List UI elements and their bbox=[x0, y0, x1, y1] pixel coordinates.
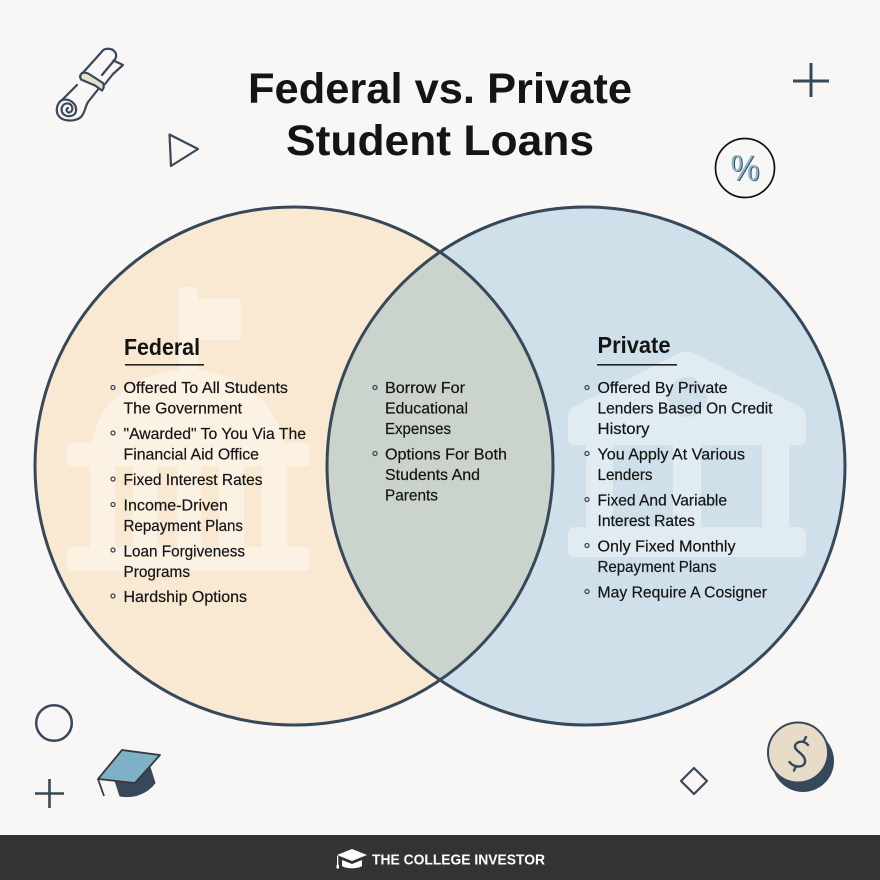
panel: overlap bbox=[328, 254, 552, 678]
panel: shared text: Educational bbox=[385, 400, 468, 418]
list: private features: History bbox=[598, 421, 650, 438]
list: federal features: Repayment Plans bbox=[124, 518, 243, 535]
icon: diamond bbox=[681, 768, 707, 794]
panel: private text bbox=[585, 332, 773, 602]
list: private features: Lenders bbox=[598, 467, 652, 484]
icon: percent badge: % bbox=[732, 148, 760, 189]
panel: shared text: Expenses bbox=[385, 421, 451, 438]
list: private features: Repayment Plans bbox=[598, 559, 716, 576]
list: federal features: Income-Driven bbox=[124, 498, 228, 514]
icon: dollar coin bbox=[768, 722, 834, 792]
icon: diploma scroll bbox=[57, 49, 123, 121]
heading: federal: Federal bbox=[124, 334, 200, 360]
list: federal features: Programs bbox=[124, 564, 190, 581]
panel: shared text: Parents bbox=[385, 488, 438, 504]
title bbox=[248, 65, 632, 165]
list: federal features: Offered To All Students bbox=[124, 380, 288, 397]
panel: shared text: Borrow For bbox=[385, 380, 466, 397]
icon: plus bottom left bbox=[35, 779, 64, 808]
icon: percent badge: % bbox=[730, 148, 760, 188]
icon: capitol building watermark bbox=[67, 287, 310, 571]
title: Student Loans bbox=[286, 117, 594, 165]
panel: federal circle bbox=[35, 207, 553, 725]
panel: shared text bbox=[373, 380, 507, 504]
logo wordmark: THE COLLEGE INVESTOR bbox=[372, 852, 545, 868]
list: federal features: The Government bbox=[124, 400, 243, 418]
list: federal features: Hardship Options bbox=[124, 589, 247, 606]
panel: federal text bbox=[111, 334, 306, 606]
icon: circle outline bbox=[36, 705, 72, 741]
list: private features bbox=[585, 380, 773, 602]
heading: private: Private bbox=[598, 332, 670, 358]
icon: plus top right bbox=[793, 63, 829, 97]
footer bar bbox=[0, 835, 880, 880]
venn diagram bbox=[35, 207, 845, 725]
list: federal features: Financial Aid Office bbox=[124, 446, 259, 464]
list: private features: Fixed And Variable bbox=[598, 492, 727, 510]
list: federal features bbox=[111, 380, 306, 606]
list: private features: Lenders Based On Credit bbox=[598, 400, 773, 418]
panel: shared text: Students And bbox=[385, 467, 480, 484]
list: private features: Interest Rates bbox=[598, 513, 695, 530]
list: federal features: Loan Forgiveness bbox=[124, 544, 245, 560]
list: federal features: "Awarded" To You Via The bbox=[124, 426, 306, 443]
panel: private circle bbox=[327, 207, 845, 725]
list: federal features: Fixed Interest Rates bbox=[124, 472, 262, 489]
list: private features: May Require A Cosigner bbox=[598, 584, 768, 602]
list: private features: Only Fixed Monthly bbox=[598, 538, 736, 556]
list: private features: Offered By Private bbox=[598, 380, 728, 397]
icon: bank watermark bbox=[568, 352, 806, 557]
circle outlines bbox=[35, 207, 845, 725]
icon: percent badge bbox=[716, 138, 774, 198]
list: private features: You Apply At Various bbox=[598, 446, 745, 464]
icon: graduation cap bbox=[98, 750, 160, 797]
icon: logo mortarboard bbox=[336, 849, 367, 868]
icon: triangle bbox=[170, 134, 198, 166]
panel: shared text: Options For Both bbox=[385, 446, 507, 464]
title: Federal vs. Private bbox=[248, 65, 632, 113]
